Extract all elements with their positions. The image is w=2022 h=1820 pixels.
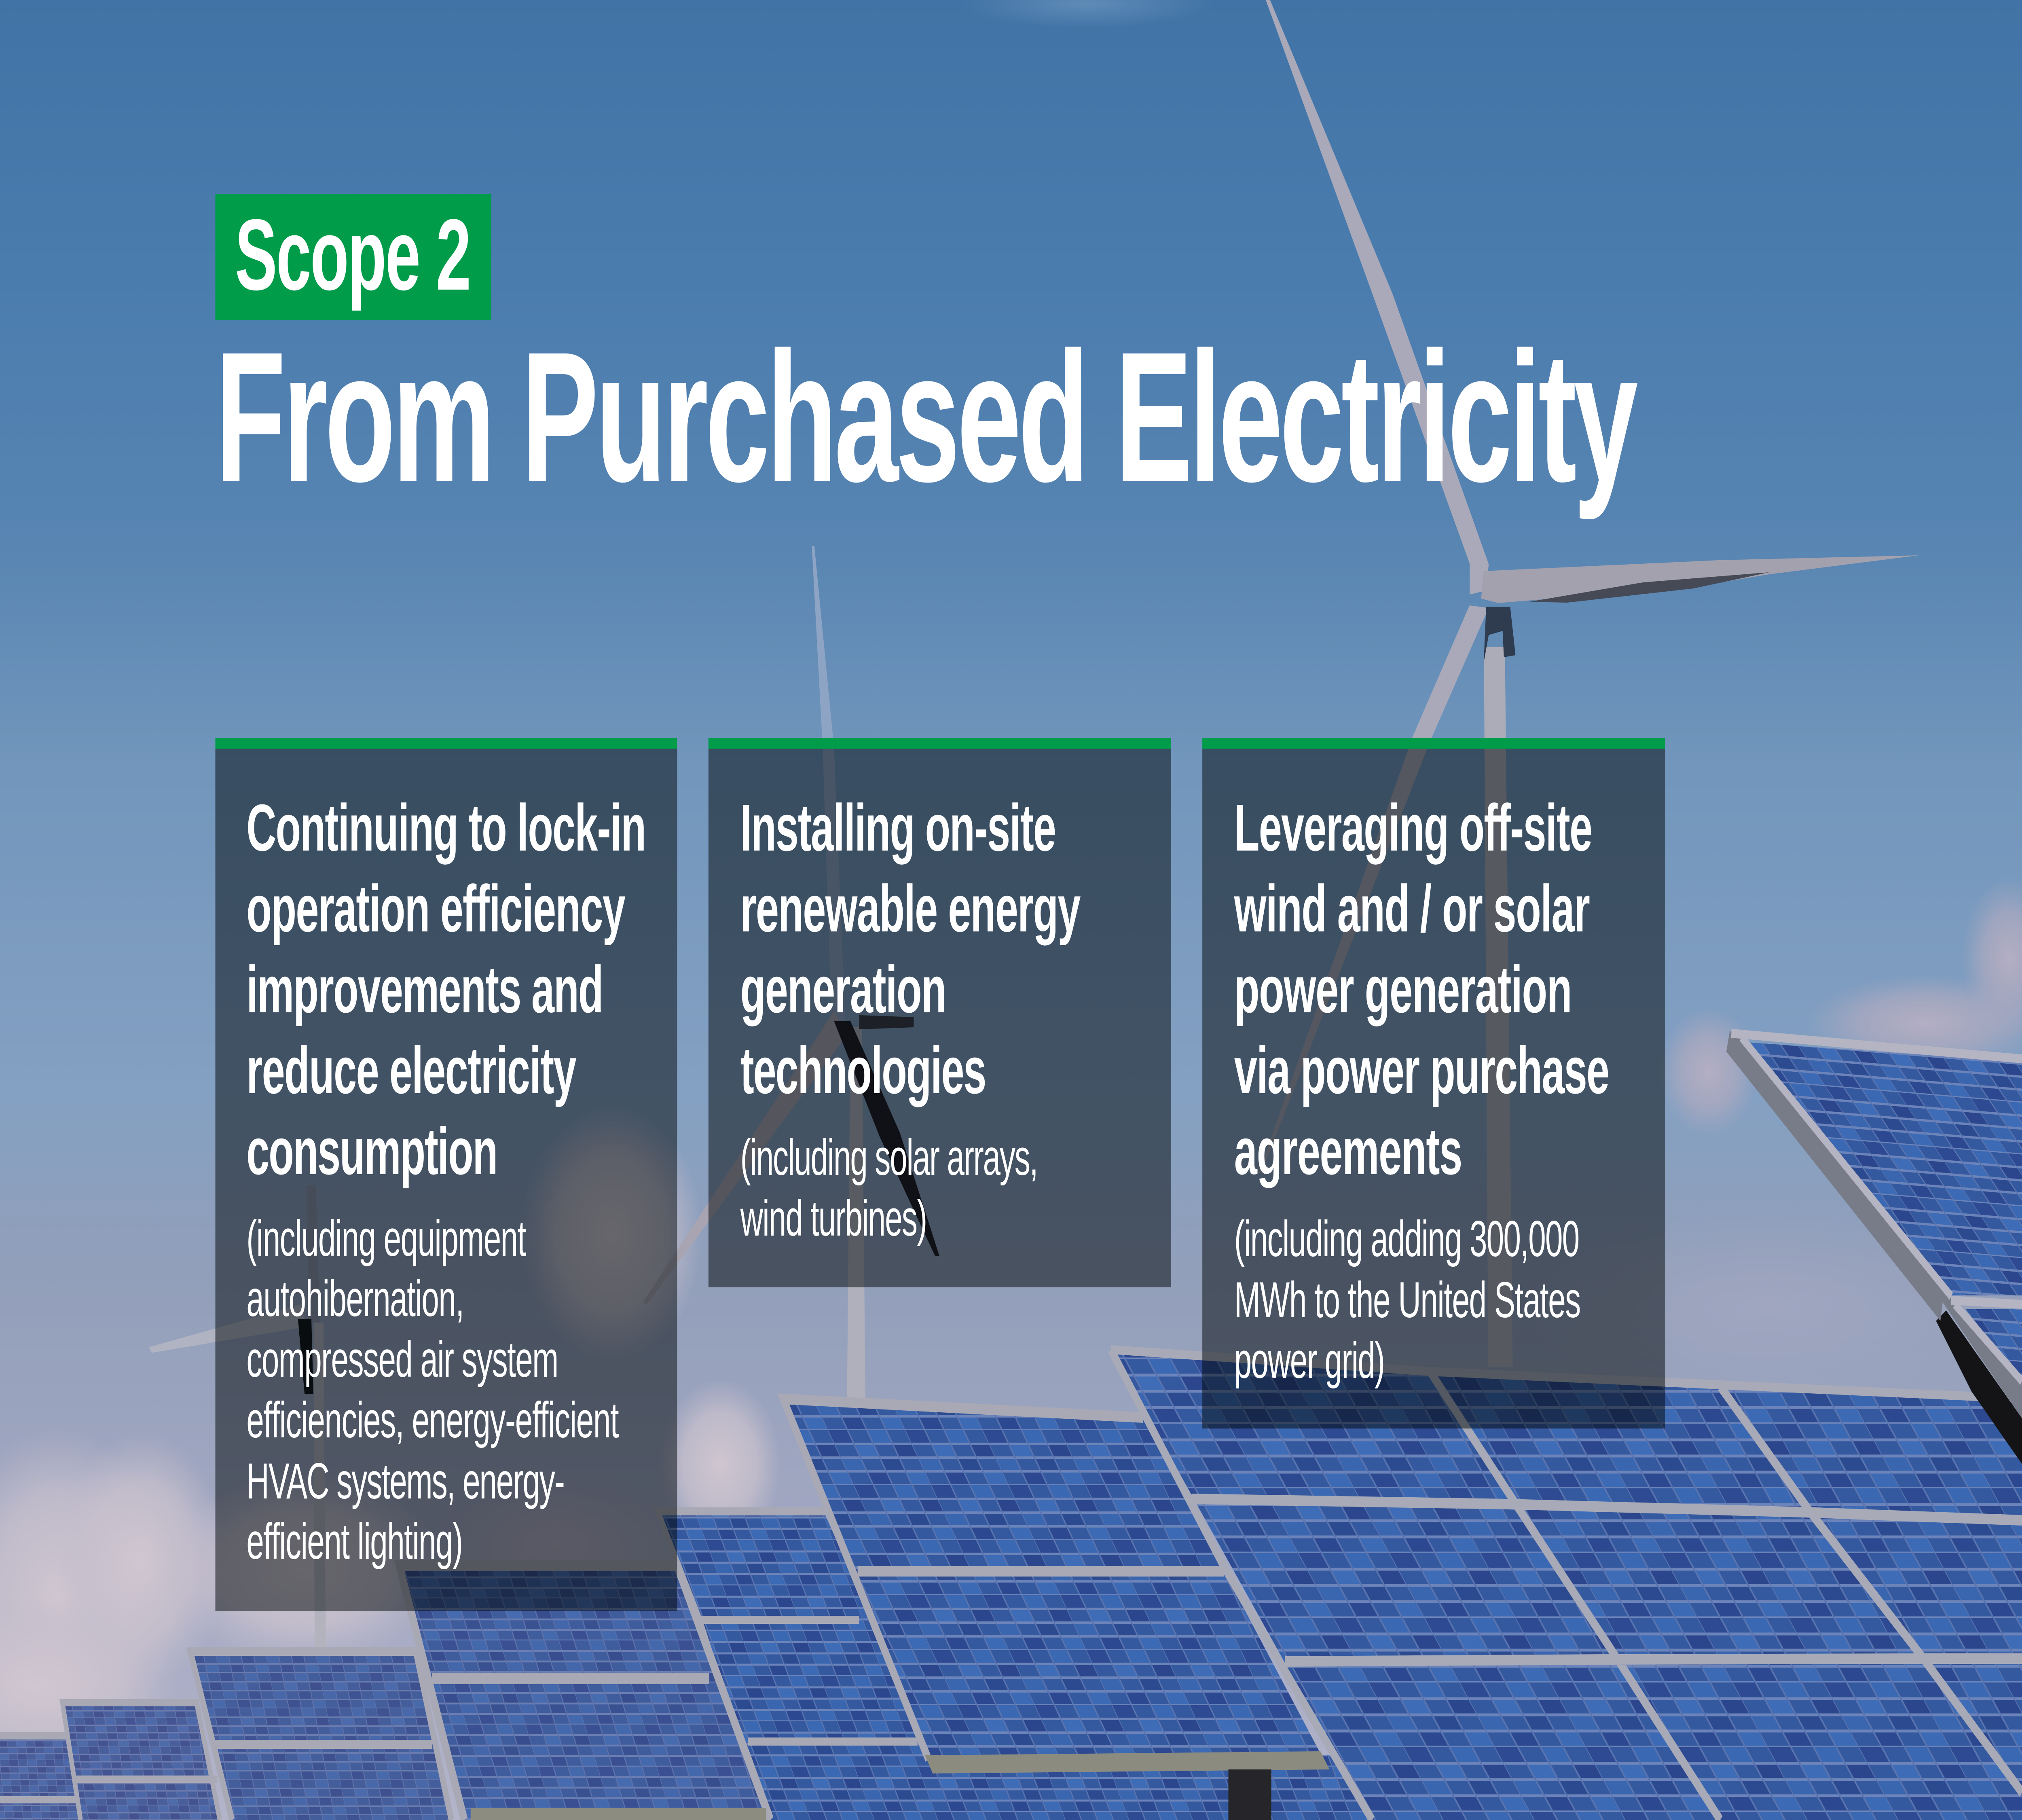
panel 2 heading: renewable energy <box>740 871 1081 946</box>
panel 1 detail text: HVAC systems, energy- <box>246 1453 565 1510</box>
solar array: centre left <box>658 1511 948 1820</box>
solar array: centre <box>783 1399 1330 1820</box>
panel 1 heading: operation efficiency <box>246 871 626 946</box>
solar array: left 3 <box>190 1651 451 1820</box>
panel 3 heading: via power purchase <box>1234 1033 1610 1107</box>
panel 1 detail text: autohibernation, <box>246 1271 464 1327</box>
panel 3 detail text: (including adding 300,000 <box>1234 1211 1580 1268</box>
wind turbine: large right <box>1258 0 1919 1367</box>
panel 2 heading: Installing on-site <box>740 790 1056 865</box>
panel 3 heading: wind and / or solar <box>1234 871 1590 946</box>
panel: off-site power purchase agreements <box>1202 738 1665 1428</box>
panel 2 detail text: (including solar arrays, <box>740 1130 1038 1186</box>
title: From Purchased Electricity <box>215 313 1639 521</box>
panel 2 heading: generation <box>740 952 947 1026</box>
solar array: back blue strip <box>910 1755 1415 1820</box>
panel 1 detail text: efficiencies, energy-efficient <box>246 1392 619 1449</box>
panel 1 detail text: (including equipment <box>246 1211 526 1267</box>
badge: Scope 2: Scope 2 <box>235 199 471 311</box>
solar array: far left <box>0 1736 83 1820</box>
panel 3 detail text <box>1234 1211 1581 1389</box>
solar array: top right <box>1726 1031 2022 1464</box>
solar array: left 2 <box>62 1701 220 1820</box>
panel 1 heading: reduce electricity <box>246 1033 577 1107</box>
panel 3 heading <box>1234 790 1610 1188</box>
panel 2 detail text: wind turbines) <box>740 1190 927 1247</box>
panel 3 heading: agreements <box>1234 1114 1462 1188</box>
panel 1 detail text: compressed air system <box>246 1331 558 1388</box>
panel 3 heading: power generation <box>1234 952 1572 1026</box>
solar array: behind panel 1 <box>400 1562 770 1820</box>
wind turbine: left <box>149 1185 326 1647</box>
panel: operation efficiency <box>215 738 677 1611</box>
panel 1 heading <box>246 790 646 1188</box>
panel 1 heading: Continuing to lock-in <box>246 790 646 865</box>
panel 1 detail text <box>246 1211 619 1570</box>
panel 1 detail text: efficient lighting) <box>246 1513 463 1570</box>
panel: on-site renewable generation <box>709 738 1171 1287</box>
panel 2 detail text <box>740 1130 1038 1247</box>
panel 2 heading: technologies <box>740 1033 986 1107</box>
solar array: large right <box>1111 1350 2022 1820</box>
panel 3 detail text: MWh to the United States <box>1234 1272 1581 1329</box>
panel 3 detail text: power grid) <box>1234 1333 1385 1389</box>
panel 1 heading: improvements and <box>246 952 604 1026</box>
panel 1 heading: consumption <box>246 1114 498 1188</box>
panel 2 heading <box>740 790 1081 1107</box>
wind turbine: middle <box>643 546 939 1401</box>
panel 3 heading: Leveraging off-site <box>1234 790 1593 865</box>
